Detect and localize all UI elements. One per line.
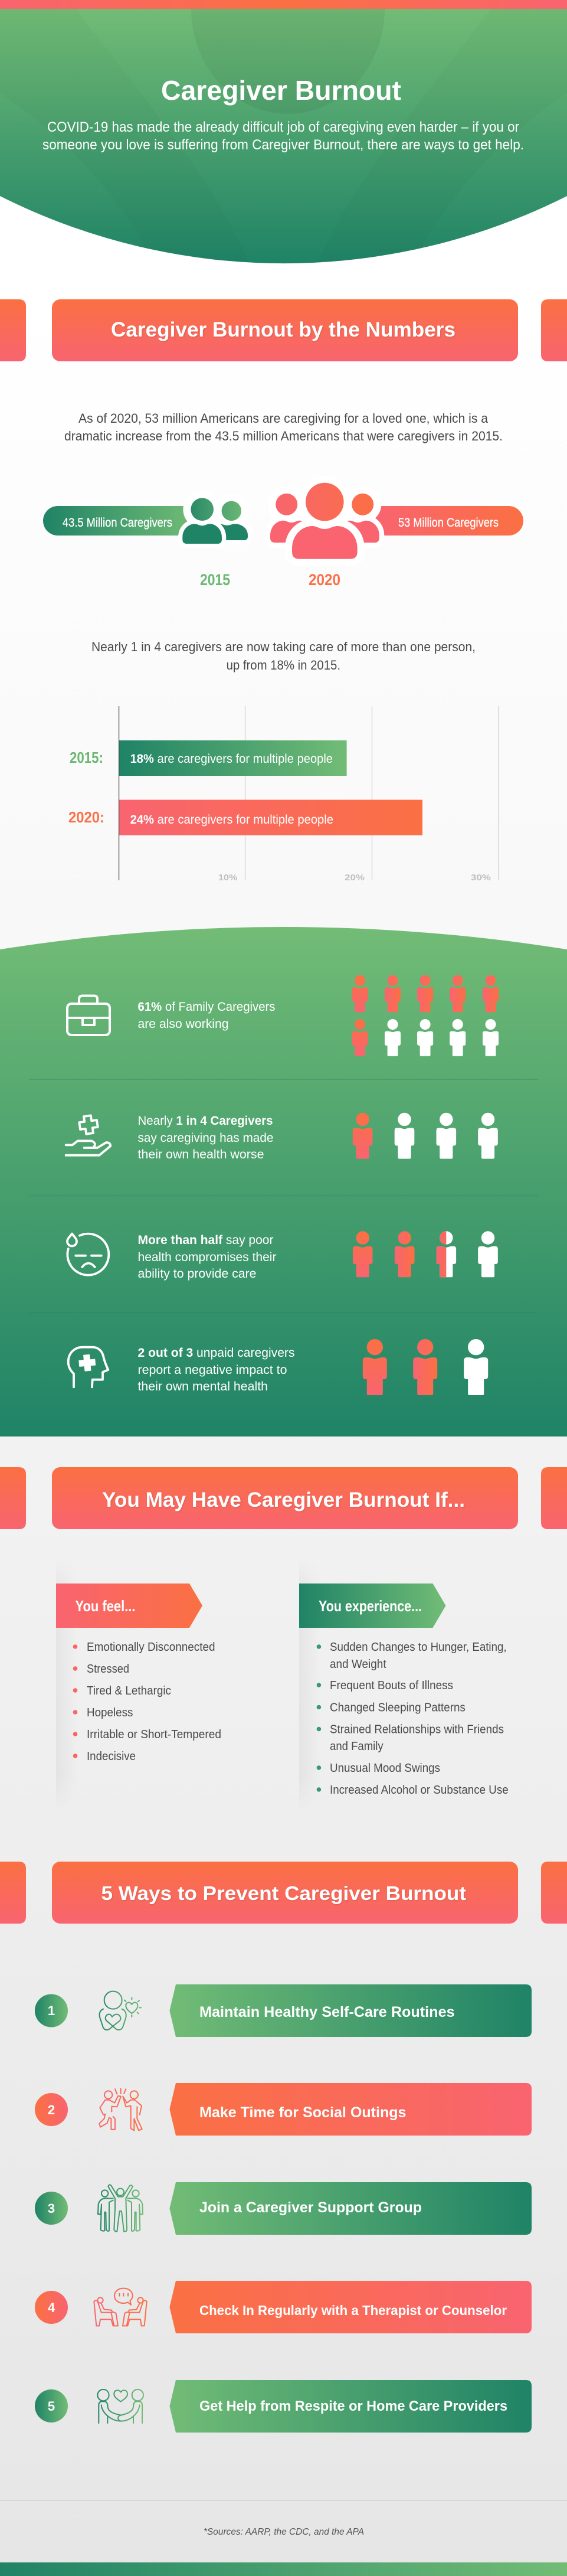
icon: self-care <box>100 1991 141 2030</box>
arrow bar 2 <box>169 2083 532 2136</box>
icon: high five <box>99 2088 142 2130</box>
bar chart: multiple-person caregivers <box>68 706 499 883</box>
number badge 4 <box>35 2291 68 2324</box>
stat text <box>138 1233 276 1281</box>
icon: people 2020 <box>270 483 379 559</box>
arrow bar 1: Maintain Healthy Self-Care Routines <box>199 2004 455 2020</box>
step 2: social outings <box>35 2083 532 2136</box>
stat text: report a negative impact to <box>138 1363 287 1377</box>
icon: holding hands with heart <box>97 2389 143 2423</box>
axis ticks <box>218 873 491 883</box>
stat row: mental health <box>68 1339 488 1395</box>
paragraph: 1 in 4 caregivers: up from 18% in 2015. <box>227 658 340 672</box>
arrow header: you experience: You experience... <box>319 1597 422 1615</box>
stat row: compromised care <box>67 1231 498 1281</box>
pill: 43.5 million: 43.5 Million Caregivers <box>63 516 172 530</box>
arrow bar 4: Check In Regularly with a Therapist or Counselor <box>199 2303 507 2318</box>
stat text: More than half say poor <box>138 1233 274 1247</box>
feelings list <box>73 1641 221 1763</box>
stat text: their own health worse <box>138 1148 264 1161</box>
icon: group of three <box>98 2185 143 2231</box>
stat text: ability to provide care <box>138 1267 256 1281</box>
axis ticks: 30% <box>471 873 491 883</box>
arrow header: you feel: You feel... <box>76 1597 136 1615</box>
people: 6 of 10 <box>352 975 499 1056</box>
people: 1 of 4 <box>353 1113 498 1159</box>
experiences list: Changed Sleeping Patterns <box>330 1702 466 1715</box>
icon: sad face with sweat drop <box>67 1234 109 1275</box>
step 4: therapist <box>35 2281 532 2333</box>
icon: briefcase <box>67 995 110 1035</box>
bar 2015 <box>119 740 347 776</box>
people: 2 of 3 <box>363 1339 488 1395</box>
step 5: respite care <box>35 2380 532 2433</box>
icon: therapy conversation <box>94 2288 147 2326</box>
axis ticks: 20% <box>345 873 365 883</box>
title: Caregiver Burnout <box>161 75 401 106</box>
header panel <box>0 0 567 263</box>
number badge 3: 3 <box>48 2201 55 2216</box>
number badge 2: 2 <box>48 2102 55 2117</box>
year label 2015: 2015 <box>200 571 230 589</box>
panel: you feel <box>56 1582 221 1784</box>
icon: head with cross <box>68 1347 108 1387</box>
number badge 2 <box>35 2093 68 2126</box>
pill: 43.5 million <box>43 506 195 536</box>
number badge 1 <box>35 1994 68 2028</box>
stat text <box>138 1346 295 1393</box>
experiences list: and Family <box>330 1740 384 1753</box>
bar 2015: 18% are caregivers for multiple people <box>130 752 333 766</box>
arrow bar 5: Get Help from Respite or Home Care Providers <box>199 2398 507 2414</box>
stat text: say caregiving has made <box>138 1131 274 1145</box>
experiences list <box>317 1641 509 1797</box>
feelings list: Irritable or Short-Tempered <box>87 1728 221 1741</box>
panel: impact statistics <box>0 927 567 1436</box>
number badge 4: 4 <box>48 2300 55 2315</box>
pill: 53 million: 53 Million Caregivers <box>398 516 499 530</box>
stat text <box>138 1000 275 1031</box>
feelings list: Indecisive <box>87 1750 136 1763</box>
arrow bar 1 <box>169 1984 532 2037</box>
feelings list: Hopeless <box>87 1706 133 1719</box>
paragraph: 53 million caregivers: dramatic increase from the 43.5 million Americans that were caregivers in 2015. <box>64 429 503 443</box>
experiences list: Strained Relationships with Friends <box>330 1723 504 1736</box>
feelings list: Tired & Lethargic <box>87 1684 171 1697</box>
feelings list: Stressed <box>87 1663 129 1676</box>
paragraph: 53 million caregivers <box>64 411 503 443</box>
stat row: health worse <box>66 1113 498 1161</box>
axis ticks: 10% <box>218 873 237 883</box>
section banner: 5 ways <box>0 1862 567 1924</box>
arrow bar 2: Make Time for Social Outings <box>199 2104 406 2121</box>
stat text: health compromises their <box>138 1251 276 1264</box>
arrow bar 5 <box>169 2380 532 2433</box>
bar 2020 <box>119 800 422 835</box>
arrow bar 3: Join a Caregiver Support Group <box>199 2199 422 2216</box>
paragraph: 53 million caregivers: As of 2020, 53 million Americans are caregiving for a loved one, which is a <box>78 411 489 426</box>
section banner: by the numbers <box>0 299 567 361</box>
number badge 1: 1 <box>48 2003 55 2018</box>
number badge 5 <box>35 2389 68 2422</box>
experiences list: and Weight <box>330 1658 386 1671</box>
experiences list: Increased Alcohol or Substance Use <box>330 1784 509 1797</box>
number badge 5: 5 <box>48 2399 55 2414</box>
sources footnote: *Sources: AARP, the CDC, and the APA <box>204 2527 364 2537</box>
step 3: support group <box>35 2182 532 2235</box>
stat text: their own mental health <box>138 1380 268 1393</box>
category label 2020: 2020: <box>68 808 104 826</box>
stat text <box>138 1114 274 1161</box>
experiences list: Unusual Mood Swings <box>330 1762 440 1775</box>
stat text: Nearly 1 in 4 Caregivers <box>138 1114 273 1128</box>
panel: you experience <box>299 1582 508 1794</box>
paragraph: 1 in 4 caregivers: Nearly 1 in 4 caregivers are now taking care of more than one person, <box>91 639 476 654</box>
section banner: you may have burnout if <box>0 1467 567 1529</box>
arrow bar 3 <box>169 2182 532 2235</box>
icon: hand with cross <box>66 1115 110 1155</box>
category label 2015: 2015: <box>70 749 103 766</box>
feelings list: Emotionally Disconnected <box>87 1641 215 1654</box>
bar 2020: 24% are caregivers for multiple people <box>130 813 333 827</box>
bottom accent bar <box>0 2562 567 2576</box>
experiences list: Sudden Changes to Hunger, Eating, <box>330 1641 507 1654</box>
intro text: someone you love is suffering from Caregiver Burnout, there are ways to get help. <box>42 137 524 153</box>
stat text: are also working <box>138 1017 229 1031</box>
stat text: 61% of Family Caregivers <box>138 1000 275 1014</box>
people: more than half <box>353 1231 498 1277</box>
intro text <box>42 119 524 153</box>
experiences list: Frequent Bouts of Illness <box>330 1679 453 1692</box>
paragraph: 1 in 4 caregivers <box>91 639 476 672</box>
stat row: working caregivers <box>67 975 499 1056</box>
intro text: COVID-19 has made the already difficult job of caregiving even harder – if you or <box>47 119 519 135</box>
top accent bar <box>0 0 567 9</box>
year label 2020: 2020 <box>309 571 340 589</box>
pill: 53 million <box>372 506 523 536</box>
number badge 3 <box>35 2192 68 2225</box>
arrow header: you feel <box>56 1584 202 1628</box>
pictogram: caregivers 2015 vs 2020 <box>43 483 523 589</box>
stat text: 2 out of 3 unpaid caregivers <box>138 1346 295 1360</box>
section banner: by the numbers: Caregiver Burnout by the Numbers <box>111 318 455 341</box>
section banner: you may have burnout if: You May Have Caregiver Burnout If... <box>102 1488 465 1511</box>
arrow bar 4 <box>169 2281 532 2333</box>
icon: people 2015 <box>182 498 248 544</box>
step 1: self-care <box>35 1984 532 2037</box>
section banner: 5 ways: 5 Ways to Prevent Caregiver Burnout <box>101 1882 466 1904</box>
arrow header: you experience <box>299 1584 446 1628</box>
